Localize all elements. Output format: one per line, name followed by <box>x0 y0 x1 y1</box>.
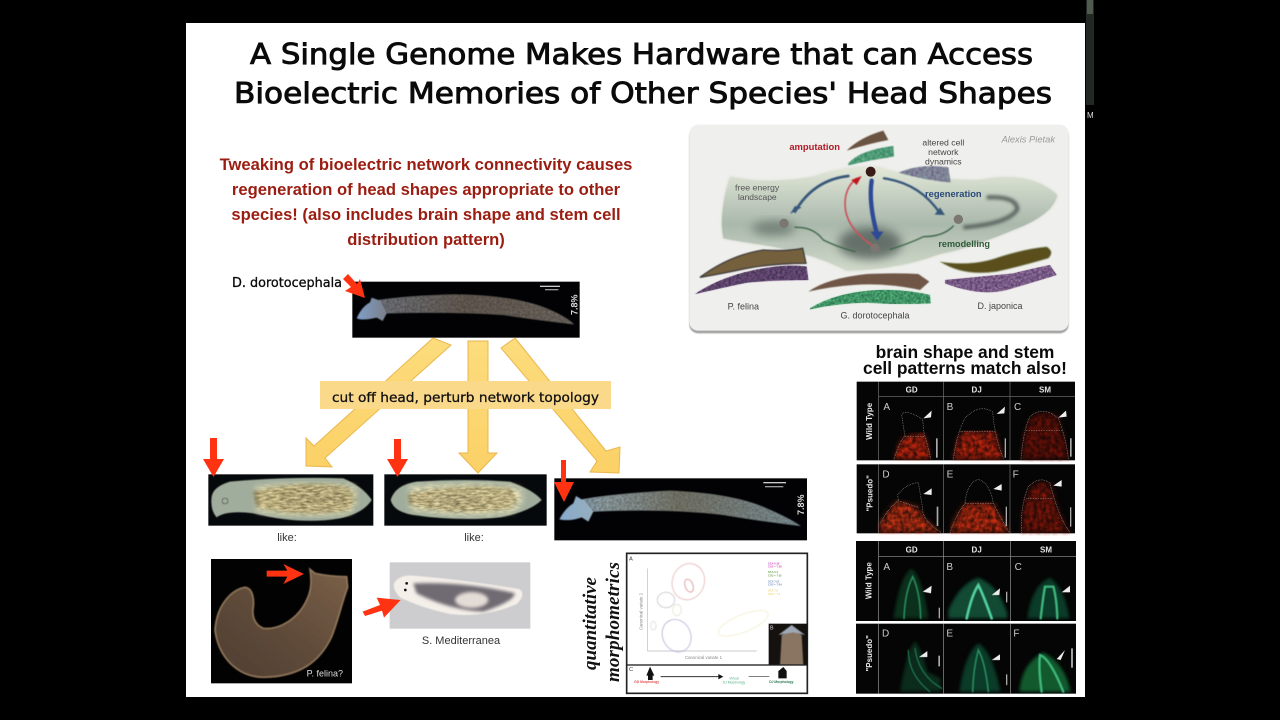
red arrow: worm 3 <box>554 460 574 502</box>
title <box>234 38 1052 110</box>
figure: red brain pattern panels: SM <box>1039 385 1051 394</box>
transition arrows <box>790 176 953 252</box>
landscape labels: amputation <box>789 142 840 152</box>
title: Bioelectric Memories of Other Species' Head Shapes <box>234 77 1052 110</box>
figure: red brain pattern panels: "Psuedo" <box>866 475 875 512</box>
figure: green stem cell panels: GD <box>906 545 918 554</box>
chart: canonical variate morphometrics: CO2 = 7.08 <box>768 565 782 569</box>
figure: red brain pattern panels: C <box>1014 402 1021 413</box>
label box: cut off head <box>320 381 611 409</box>
heading: brain shape: cell patterns match also! <box>863 358 1067 378</box>
figure: green stem cell panels: DJ <box>972 545 982 554</box>
landscape labels: network <box>928 147 959 157</box>
figure: red brain pattern panels <box>857 382 1075 533</box>
photo: regenerated worm 1 <box>208 474 373 526</box>
figure: green stem cell panels: Wild Type <box>864 562 873 599</box>
landscape labels: Alexis Pietak <box>1001 134 1056 144</box>
figure: green stem cell panels: SM <box>1040 545 1052 554</box>
figure: red brain pattern panels: F <box>1013 469 1019 480</box>
figure: green stem cell panels: F <box>1013 628 1019 639</box>
species worm: G. dorotocephala: G. dorotocephala <box>841 311 909 321</box>
photo: S. Mediterranea <box>363 562 530 629</box>
video strip at right edge: M <box>1087 111 1094 120</box>
photo: D. dorotocephala worm: 7.8% <box>569 295 579 315</box>
figure: green stem cell panels: C <box>1015 562 1022 573</box>
photo: regenerated worm 3 <box>554 478 807 540</box>
chart: canonical variate morphometrics: SCA 6.38 <box>768 561 780 565</box>
figure: green stem cell panels: "Psuedo" <box>865 635 874 672</box>
chart: canonical variate morphometrics: GD Morphology <box>634 680 659 684</box>
red arrow: top worm <box>343 274 365 298</box>
chart: canonical variate morphometrics: B <box>770 626 774 632</box>
figure: green stem cell panels: D <box>882 628 889 639</box>
figure: red brain pattern panels: Wild Type <box>865 402 874 440</box>
title: A Single Genome Makes Hardware that can Access <box>250 38 1033 71</box>
figure: green stem cell panels: B <box>946 562 953 573</box>
landscape surface <box>722 167 1057 271</box>
panel: free energy landscape <box>689 125 1069 333</box>
figure: red brain pattern panels: D <box>882 469 890 480</box>
photo: D. dorotocephala worm <box>352 282 580 338</box>
species worm: D. japonica <box>940 247 1057 311</box>
red explanatory text: distribution pattern) <box>347 230 505 249</box>
species worm: D. japonica: D. japonica <box>978 301 1022 311</box>
chart: canonical variate morphometrics: Virtual <box>729 676 739 680</box>
figure: red brain pattern panels: GD <box>906 385 918 394</box>
yellow arrow: left <box>306 338 451 467</box>
figure: green stem cell panels <box>856 541 1076 694</box>
label: quantitative morphometrics: quantitative <box>580 576 601 670</box>
label: D. dorotocephala: D. dorotocephala <box>232 276 342 291</box>
landscape labels: landscape <box>738 192 777 202</box>
species worm: G. dorotocephala <box>808 273 931 321</box>
chart: canonical variate morphometrics: CO2 = 7.6 <box>768 592 781 596</box>
label box: cut off head: cut off head, perturb network topology <box>332 390 599 406</box>
chart: canonical variate morphometrics: DJ Morphology <box>723 681 746 685</box>
figure: red brain pattern panels: A <box>883 402 890 413</box>
landscape labels: altered cell <box>922 137 964 147</box>
chart: canonical variate morphometrics: SCA 6.4 <box>768 570 778 574</box>
photo: regenerated worm 2 <box>384 474 547 526</box>
yellow arrow: middle <box>459 341 497 473</box>
chart: canonical variate morphometrics: Canonical variate 1 <box>685 655 723 660</box>
chart: canonical variate morphometrics <box>627 553 807 693</box>
red explanatory text: Tweaking of bioelectric network connectivity causes <box>220 155 632 174</box>
red explanatory text: species! (also includes brain shape and stem cell <box>231 205 621 224</box>
red arrow: worm 2 <box>387 439 408 477</box>
chart: canonical variate morphometrics: A <box>629 556 633 562</box>
figure: green stem cell panels: E <box>946 628 953 639</box>
label: quantitative morphometrics: morphometrics <box>603 562 624 682</box>
species worm: P. felina <box>695 248 808 311</box>
figure: red brain pattern panels: DJ <box>972 385 982 394</box>
chart: canonical variate morphometrics: SCA 7.6 <box>768 589 778 593</box>
label: quantitative morphometrics <box>580 562 624 682</box>
photo: P. felina <box>211 559 352 683</box>
chart: canonical variate morphometrics: DJ Morphology <box>769 680 794 684</box>
caption: like (left): like: <box>277 532 297 544</box>
chart: canonical variate morphometrics: CO2 = 7.02 <box>768 573 782 577</box>
photo: regenerated worm 3: 7.8% <box>796 495 806 515</box>
figure: green stem cell panels: A <box>883 562 890 573</box>
red arrow: worm 1 <box>203 438 224 477</box>
chart: canonical variate morphometrics: C <box>629 667 633 673</box>
chart: canonical variate morphometrics: CO2 = 7.04 <box>768 583 782 587</box>
photo: P. felina: P. felina? <box>307 669 343 679</box>
landscape labels <box>735 134 1056 249</box>
landscape labels: remodelling <box>938 239 990 249</box>
red explanatory text: regeneration of head shapes appropriate to other <box>232 180 621 199</box>
yellow arrow: right <box>501 338 620 473</box>
species worm: P. felina: P. felina <box>728 301 759 311</box>
heading: brain shape <box>863 342 1067 378</box>
caption: like (right): like: <box>464 532 484 544</box>
chart: canonical variate morphometrics: Canonical variate 2 <box>639 592 644 630</box>
figure: red brain pattern panels: B <box>947 402 954 413</box>
figure: red brain pattern panels: E <box>947 469 954 480</box>
landscape labels: free energy <box>735 182 780 192</box>
landscape labels: regeneration <box>925 189 982 199</box>
red explanatory text <box>220 155 632 249</box>
landscape labels: dynamics <box>925 157 962 167</box>
video strip at right edge <box>1086 0 1094 120</box>
top worm and cell clusters <box>847 131 951 183</box>
chart: canonical variate morphometrics: SCA 7.02 <box>768 579 780 583</box>
caption: S. Mediterranea: S. Mediterranea <box>422 635 501 647</box>
slide background <box>186 23 1085 697</box>
heading: brain shape: brain shape and stem <box>876 342 1054 362</box>
